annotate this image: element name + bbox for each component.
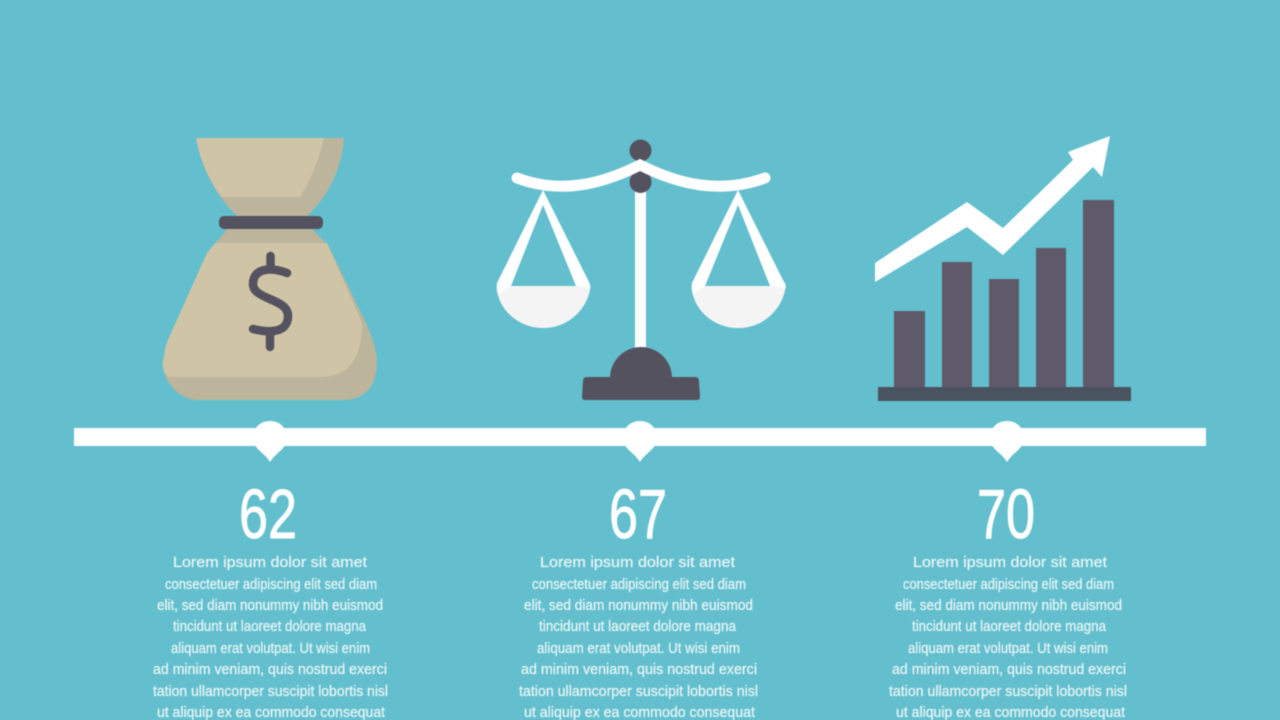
- text block 1: elit, sed diam nonummy nibh euismod: [157, 598, 383, 614]
- text block 2: elit, sed diam nonummy nibh euismod: [524, 598, 753, 614]
- text block 3: ad minim veniam, quis nostrud exerci: [892, 662, 1126, 678]
- text block 3: [889, 555, 1127, 720]
- panel: column 67: [519, 475, 758, 720]
- text block 1: Lorem ipsum dolor sit amet: [173, 555, 367, 571]
- text block 2: ad minim veniam, quis nostrud exerci: [521, 662, 757, 678]
- text block 2: Lorem ipsum dolor sit amet: [540, 555, 735, 571]
- text block 3: tincidunt ut laoreet dolore magna: [912, 619, 1107, 635]
- timeline: [74, 421, 1206, 462]
- number 67: 67: [609, 475, 667, 553]
- text block 1: ad minim veniam, quis nostrud exerci: [153, 662, 387, 678]
- panel: column 70: [889, 475, 1127, 720]
- text block 2: consectetuer adipiscing elit sed diam: [532, 577, 746, 593]
- icon: growth chart: [875, 136, 1131, 401]
- text block 3: aliquam erat volutpat. Ut wisi enim: [908, 641, 1108, 657]
- text block 2: [519, 555, 758, 720]
- icon: dollar sign: [253, 256, 288, 347]
- text block 3: tation ullamcorper suscipit lobortis nisl: [889, 684, 1127, 700]
- text block 3: Lorem ipsum dolor sit amet: [913, 555, 1107, 571]
- text block 3: elit, sed diam nonummy nibh euismod: [895, 598, 1122, 614]
- number 62: 62: [239, 475, 297, 553]
- text block 3: consectetuer adipiscing elit sed diam: [903, 577, 1114, 593]
- icon: balance scale: [497, 140, 786, 400]
- text block 1: aliquam erat volutpat. Ut wisi enim: [171, 641, 370, 657]
- icon: money bag: [163, 138, 377, 400]
- text block 2: aliquam erat volutpat. Ut wisi enim: [537, 641, 740, 657]
- text block 2: tation ullamcorper suscipit lobortis nisl: [519, 684, 758, 700]
- text block 1: tincidunt ut laoreet dolore magna: [173, 619, 367, 635]
- text block 1: tation ullamcorper suscipit lobortis nisl: [153, 684, 388, 700]
- text block 1: [153, 555, 388, 720]
- text block 1: consectetuer adipiscing elit sed diam: [165, 577, 377, 593]
- number 70: 70: [977, 475, 1035, 553]
- panel: column 62: [153, 475, 388, 720]
- text block 2: tincidunt ut laoreet dolore magna: [539, 619, 737, 635]
